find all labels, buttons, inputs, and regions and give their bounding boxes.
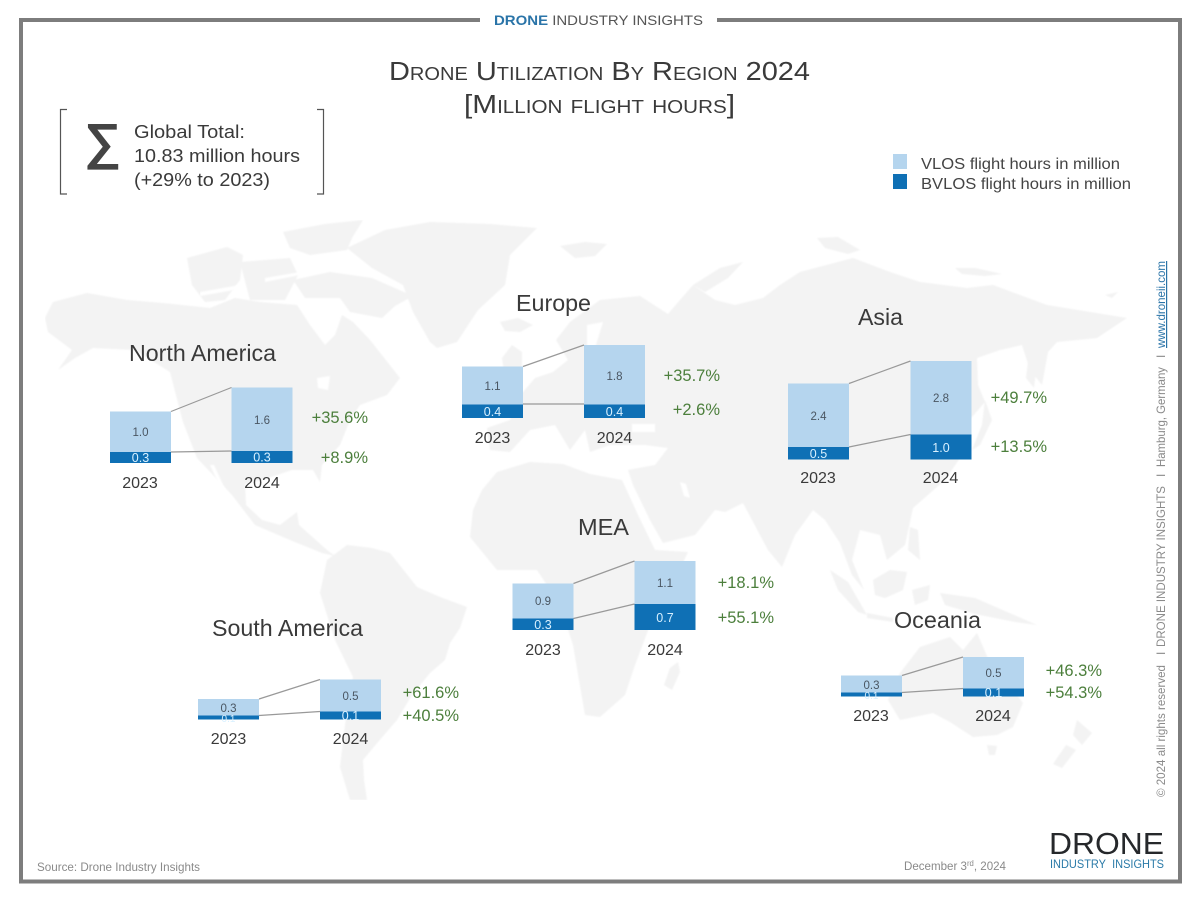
panel: Asia: 1.0: [932, 441, 950, 455]
side credit text: [1154, 261, 1168, 797]
date: rd: [967, 859, 974, 868]
panel: North America: [110, 340, 368, 492]
global total text: Global Total:: [134, 121, 245, 142]
panel: MEA: 0.7: [656, 611, 674, 625]
panel: MEA: +55.1%: [718, 609, 774, 627]
panel: MEA: MEA: [578, 514, 630, 540]
panel: South America: 0.3: [220, 703, 236, 715]
panel: Asia: 0.5: [810, 447, 827, 461]
panel: Oceania: 0.1: [865, 691, 879, 702]
world map background: [45, 220, 1127, 800]
panel: North America: 1.6: [254, 415, 270, 427]
title: Drone Utilization By Region 2024: [389, 56, 810, 86]
panel: MEA: +18.1%: [718, 574, 774, 592]
panel: Oceania: +46.3%: [1046, 662, 1102, 680]
panel: Oceania: 0.5: [986, 668, 1002, 680]
panel: MEA: 0.9: [535, 596, 551, 608]
panel: Asia: +49.7%: [991, 389, 1047, 407]
side credit text: I: [1154, 652, 1168, 655]
source note: Source: Drone Industry Insights: [37, 860, 200, 874]
panel: Oceania: 0.1: [985, 686, 1002, 700]
side credit text: I: [1154, 474, 1168, 477]
panel: MEA: [512, 514, 774, 659]
panel: Oceania: 0.3: [864, 680, 880, 692]
panel: Oceania: [841, 607, 1102, 725]
panel: South America: [198, 615, 459, 748]
panel: Europe: 1.1: [484, 381, 500, 393]
panel: Asia: [788, 304, 1047, 487]
side credit text: www.droneii.com: [1154, 261, 1168, 349]
title: [Million flight hours]: [464, 89, 735, 119]
panel: North America: 1.0: [132, 427, 148, 439]
panel: Europe: +35.7%: [664, 367, 720, 385]
global total text: (+29% to 2023): [134, 169, 270, 190]
panel: Europe: 1.8: [606, 371, 622, 383]
panel: Europe: 0.4: [606, 405, 623, 419]
global total text: 10.83 million hours: [134, 145, 300, 166]
panel: South America: 2023: [211, 731, 246, 748]
South America landmass: [320, 545, 467, 800]
panel: Oceania: 2024: [975, 708, 1011, 725]
panel: MEA: 2023: [525, 642, 561, 659]
panel: MEA: 2024: [647, 642, 683, 659]
side credit text: © 2024 all rights reserved: [1154, 665, 1168, 797]
logo: DRONE: [1049, 826, 1164, 861]
panel: Europe: 2024: [597, 430, 632, 447]
panel: Asia: Asia: [858, 304, 903, 330]
panel: Oceania: Oceania: [894, 607, 981, 633]
legend: VLOS flight hours in million: [921, 156, 1120, 173]
map inland water details: [200, 272, 690, 500]
panel: Asia: 2024: [923, 470, 958, 487]
date: , 2024: [974, 859, 1006, 873]
panel: North America: 2024: [244, 475, 280, 492]
panel: Asia: 2.8: [933, 393, 949, 405]
global total text: [134, 121, 300, 190]
panel: North America: +8.9%: [321, 449, 368, 467]
panel: Asia: 2.4: [810, 411, 827, 423]
panel: South America: 2024: [333, 731, 368, 748]
frame header label: DRONE INDUSTRY INSIGHTS: [494, 12, 703, 28]
panel: Asia: 2023: [800, 470, 836, 487]
legend: BVLOS flight hours in million: [921, 176, 1131, 193]
panel: MEA: 0.3: [534, 618, 552, 632]
side credit text: I: [1154, 355, 1168, 358]
panel: North America: 2023: [122, 475, 158, 492]
side credit text: Hamburg, Germany: [1154, 367, 1168, 467]
logo: INDUSTRY INSIGHTS: [1050, 857, 1164, 871]
panel: Oceania: 2023: [853, 708, 889, 725]
panel: South America: 0.5: [342, 691, 358, 703]
panel: North America: +35.6%: [312, 409, 368, 427]
legend: [893, 154, 1131, 193]
title: [389, 56, 810, 119]
date: December 3: [904, 859, 969, 873]
panel: Oceania: +54.3%: [1046, 684, 1102, 702]
panel: Europe: 2023: [475, 430, 510, 447]
panel: Europe: +2.6%: [673, 401, 720, 419]
panel: MEA: 1.1: [657, 578, 673, 590]
panel: Europe: 0.4: [484, 405, 501, 419]
panel: North America: 0.3: [253, 450, 271, 464]
panel: South America: South America: [212, 615, 363, 641]
icon: sigma: ∑: [84, 114, 121, 170]
panel: Europe: Europe: [516, 290, 591, 316]
panel: North America: North America: [129, 340, 276, 366]
panel: North America: 0.3: [132, 451, 149, 465]
panel: South America: +61.6%: [403, 684, 459, 702]
panel: Asia: +13.5%: [991, 438, 1047, 456]
callout: global total: [60, 110, 324, 194]
side credit text: DRONE INDUSTRY INSIGHTS: [1154, 486, 1168, 647]
panel: South America: 0.1: [342, 709, 359, 723]
panel: South America: 0.1: [222, 714, 236, 725]
panel: Europe: [462, 290, 720, 447]
panel: South America: +40.5%: [403, 707, 459, 725]
